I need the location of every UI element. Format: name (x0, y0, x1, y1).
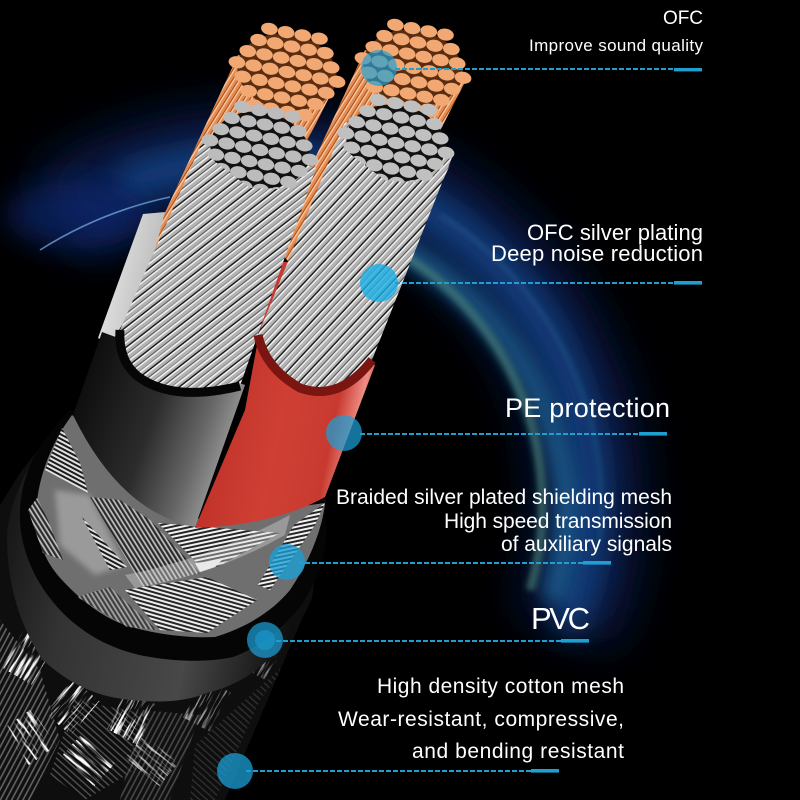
text: Wear-resistant, compressive, (338, 708, 624, 731)
callout marker and leader (247, 622, 589, 658)
cable illustration (0, 12, 480, 800)
callout: PVC (247, 601, 590, 658)
text: OFC (663, 8, 703, 29)
callout marker and leader (361, 50, 702, 86)
text: PVC (531, 601, 590, 636)
white inner sleeve (98, 212, 165, 345)
PVC grey ring (7, 412, 326, 702)
text: PE protection (505, 393, 670, 423)
text: and bending resistant (412, 740, 624, 763)
callout: cotton mesh (217, 675, 624, 789)
black ring (20, 410, 326, 661)
text (529, 8, 704, 55)
wire: silver right (258, 87, 463, 391)
text (338, 675, 624, 763)
callout: braided shielding mesh (269, 486, 672, 580)
text: Deep noise reduction (491, 241, 703, 266)
background: blue light arcs (5, 160, 602, 630)
text: Braided silver plated shielding mesh (336, 486, 672, 509)
text: High density cotton mesh (377, 675, 624, 698)
callout marker and leader (269, 544, 611, 580)
red PE sleeve (195, 262, 375, 528)
text (491, 220, 703, 266)
callout marker and leader (360, 264, 702, 302)
black PE sleeve (73, 332, 245, 527)
outer cotton braid (0, 452, 302, 800)
text (336, 486, 672, 556)
text: Improve sound quality (529, 36, 704, 55)
callout marker and leader (326, 415, 667, 451)
wire: copper left (150, 16, 354, 265)
text: OFC silver plating (527, 220, 703, 245)
callout marker and leader (217, 753, 559, 789)
callout: OFC silver plating (360, 220, 703, 302)
callout: PE protection (326, 393, 670, 451)
callout: OFC (361, 8, 704, 86)
wire: copper right (275, 12, 480, 270)
text: of auxiliary signals (501, 533, 672, 556)
text: High speed transmission (444, 510, 672, 533)
braided silver shielding mesh (28, 415, 325, 637)
wire: silver left (120, 94, 327, 392)
